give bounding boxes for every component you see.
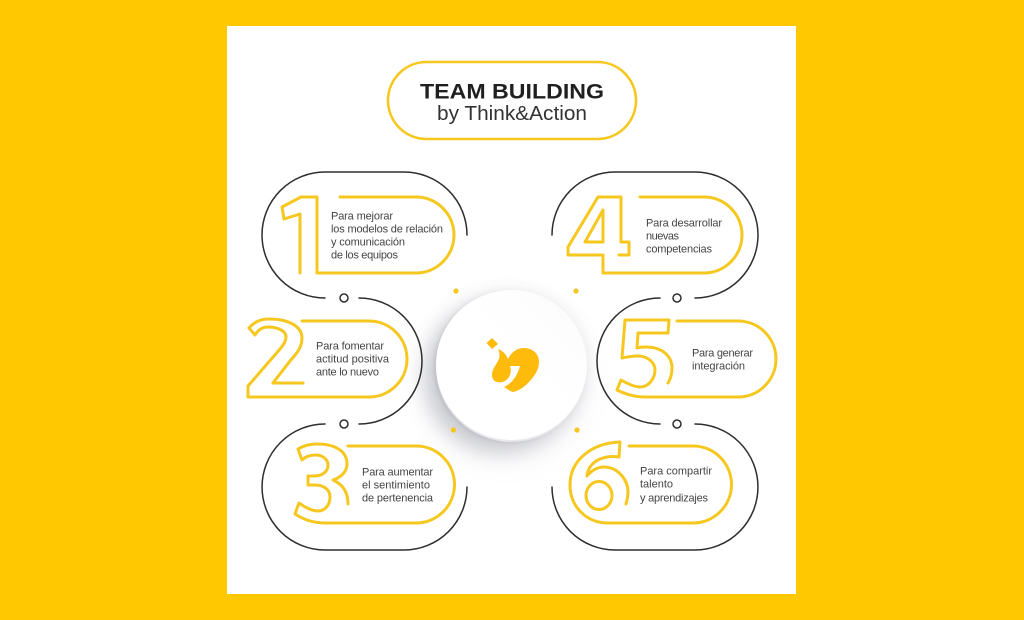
text 5 xyxy=(692,348,753,372)
text 3 xyxy=(362,466,434,504)
connector dot 2-3 xyxy=(340,420,348,428)
number 2 xyxy=(248,319,407,397)
item 3: sentimiento de pertenencia xyxy=(262,424,467,550)
connector dot 5-6 xyxy=(673,420,681,428)
number 5 xyxy=(617,320,776,397)
item 6: talento y aprendizajes xyxy=(552,424,758,550)
text 6: y aprendizajes xyxy=(640,492,708,504)
text 1: de los equipos xyxy=(331,250,398,262)
item 4: nuevas competencias xyxy=(552,172,758,298)
item 2: actitud positiva xyxy=(248,298,422,424)
number 1 xyxy=(282,197,454,273)
central disc with shadow xyxy=(436,290,587,440)
text 1: los modelos de relación xyxy=(331,224,443,236)
outline 1 xyxy=(262,172,467,298)
decorative yellow dots xyxy=(451,288,580,433)
item 5: integración xyxy=(597,298,776,424)
text 6: Para compartir xyxy=(640,466,712,478)
text 6 xyxy=(640,466,712,504)
number 4 xyxy=(568,197,742,273)
text 5: Para generar xyxy=(692,348,753,360)
text 4: nuevas xyxy=(646,230,680,242)
text 1 xyxy=(331,210,443,262)
text 3: el sentimiento xyxy=(362,480,430,492)
title pill xyxy=(388,62,636,139)
text 2: Para fomentar xyxy=(316,340,384,352)
text 1: Para mejorar xyxy=(331,210,393,222)
text 4 xyxy=(646,218,722,256)
item 1: mejorar modelos xyxy=(262,172,467,298)
number 6 xyxy=(570,442,732,523)
text 3: Para aumentar xyxy=(362,466,433,478)
text 2: ante lo nuevo xyxy=(316,366,379,378)
number 3 xyxy=(295,444,454,523)
outline 2 xyxy=(359,298,422,424)
outline 6 xyxy=(552,424,758,550)
heading: team building: TEAM BUILDING xyxy=(420,80,604,104)
outline 5 xyxy=(597,298,660,424)
text 4: Para desarrollar xyxy=(646,218,722,230)
number 6 inner loop xyxy=(586,482,612,510)
connector dot 4-5 xyxy=(673,294,681,302)
text 2: actitud positiva xyxy=(316,354,390,366)
text 1: y comunicación xyxy=(331,236,405,248)
text 6: talento xyxy=(640,478,673,490)
panel: white card xyxy=(227,26,796,594)
text 2 xyxy=(316,340,390,378)
outline 4 xyxy=(552,172,758,298)
text 4: competencias xyxy=(646,244,712,256)
connector dot 1-2 xyxy=(340,294,348,302)
icon: central logo xyxy=(486,338,539,392)
text 5: integración xyxy=(692,360,745,372)
outline 3 xyxy=(262,424,467,550)
subheading: by Think&Action: by Think&Action xyxy=(437,103,587,125)
text 3: de pertenencia xyxy=(362,492,434,504)
